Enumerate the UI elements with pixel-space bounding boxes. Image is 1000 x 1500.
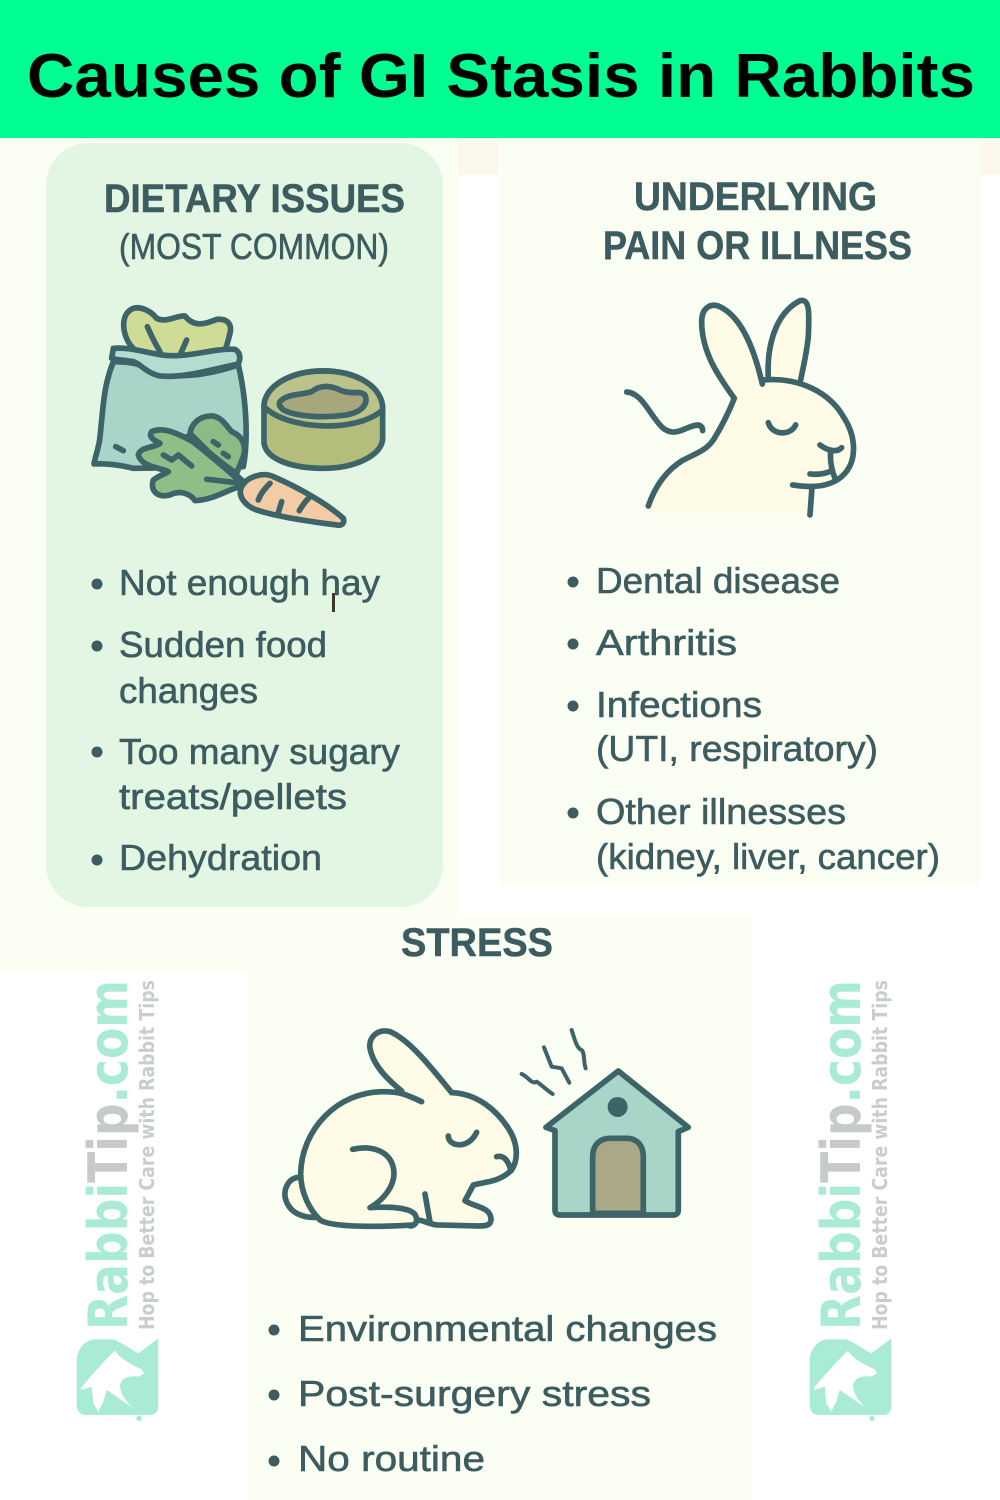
- icon: rabbit in pain: [627, 300, 854, 515]
- watermark: right RabbitTip logo: RabbiTip.com: [810, 980, 873, 1330]
- watermark: left RabbitTip logo: Hop to Better Care with Rabbit Tips: [135, 980, 159, 1330]
- list: underlying pain or illness: Arthritis: [596, 622, 737, 663]
- list: underlying pain or illness: (UTI, respiratory): [596, 728, 878, 769]
- icon: stressed rabbit beside house: [285, 1030, 688, 1227]
- heading: underlying pain or illness: UNDERLYING: [634, 175, 877, 219]
- list: dietary issues: Not enough hay: [119, 562, 380, 603]
- list: underlying pain or illness: [568, 560, 940, 877]
- list: stress: [268, 1308, 717, 1479]
- panel: stress: [248, 915, 752, 1500]
- heading: stress: STRESS: [401, 921, 553, 965]
- icon: hay bag, food bowl, greens and carrot: [94, 308, 383, 525]
- list: stress: No routine: [298, 1438, 485, 1479]
- title banner: [0, 0, 1000, 138]
- list: stress: Environmental changes: [298, 1308, 717, 1349]
- title: Causes of GI Stasis in Rabbits: [27, 42, 975, 111]
- panel: underlying pain or illness: [500, 143, 980, 885]
- list: dietary issues: treats/pellets: [119, 776, 347, 817]
- list: underlying pain or illness: (kidney, liver, cancer): [596, 836, 940, 877]
- panel: dietary issues: [46, 143, 443, 907]
- heading: underlying pain or illness: PAIN OR ILLNESS: [603, 224, 912, 268]
- heading: dietary issues: DIETARY ISSUES: [104, 177, 405, 221]
- list: dietary issues: changes: [119, 670, 258, 711]
- list: dietary issues: [92, 562, 400, 878]
- heading: underlying pain or illness: [603, 175, 912, 268]
- watermark: left RabbitTip logo: [77, 980, 159, 1421]
- watermark: right RabbitTip logo: Hop to Better Care with Rabbit Tips: [868, 980, 892, 1330]
- list: dietary issues: Sudden food: [119, 624, 327, 665]
- subheading: most common: (MOST COMMON): [119, 226, 389, 267]
- list: dietary issues: Dehydration: [119, 837, 322, 878]
- list: underlying pain or illness: Dental disease: [596, 560, 840, 601]
- list: dietary issues: Too many sugary: [119, 731, 400, 772]
- watermark: left RabbitTip logo: RabbiTip.com: [77, 980, 140, 1330]
- watermark: right RabbitTip logo: [810, 980, 892, 1421]
- list: underlying pain or illness: Infections: [596, 684, 762, 725]
- list: underlying pain or illness: Other illnesses: [596, 791, 846, 832]
- list: stress: Post-surgery stress: [298, 1373, 651, 1414]
